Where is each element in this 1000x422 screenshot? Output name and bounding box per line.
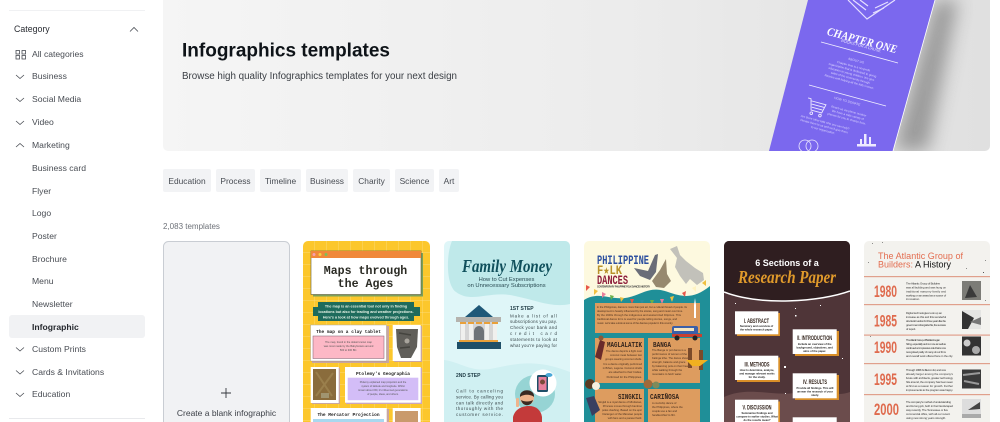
row 1980: traditional masonry family and	[906, 290, 946, 294]
sub item: menu: Menu	[32, 276, 54, 286]
step 2: can talk directly and	[456, 400, 503, 406]
icon: open book	[848, 0, 895, 19]
illustration: jeepney	[672, 298, 702, 340]
top blob	[448, 241, 570, 305]
row 1990: 1990	[874, 338, 897, 357]
chip: process	[216, 169, 255, 192]
panel: banga: The Banga or pot dance is a	[652, 348, 686, 352]
row 1980: The Atlantic Group of Builders	[906, 282, 941, 286]
about us text: sales of the community through	[831, 71, 871, 85]
window title: Maps through	[324, 265, 407, 278]
panel: carinosa	[648, 389, 700, 422]
bunting flags	[586, 280, 706, 305]
section: ptolemy: Ptolemy's Geographia	[356, 371, 410, 377]
nav item: education: Education	[32, 389, 70, 399]
panel: singkil: Singkil is a royal dance of Mindanao,	[598, 400, 642, 404]
section box: discussion: compare to earlier studies. What	[736, 414, 778, 418]
section box: methods	[735, 356, 780, 382]
title: PHILIPPINE	[597, 253, 649, 268]
title window	[311, 251, 423, 296]
icon: books stack	[857, 134, 876, 146]
title window: the Ages	[338, 278, 393, 291]
chip: science: Science	[400, 176, 430, 186]
intro panel: In the Philippines, dance is more than just art, but a cultural thread of people. Its	[597, 305, 688, 309]
chip: business: Business	[310, 176, 344, 186]
row 2000: commercial office, with all our recent	[906, 412, 950, 416]
section box: abstract: I. ABSTRACT	[744, 319, 769, 325]
nav item: video	[16, 117, 54, 127]
nav item: business	[16, 71, 67, 81]
panel: singkil: with fans and a parasol held.	[608, 416, 642, 420]
sub item: newsletter: Newsletter	[32, 299, 73, 309]
row 2000: and its long job, both in their landscaped	[906, 404, 953, 408]
row 1990: hiring, especially as it is more as well as	[906, 342, 947, 346]
about us text: Chapter One is a nonprofit	[837, 60, 871, 73]
panel: maglalatik: Performed for the Philippines.	[607, 375, 642, 379]
section: mercator: The Mercator Projection	[317, 412, 380, 418]
panel: carinosa: couple use a fan and	[652, 409, 677, 413]
row 1980	[874, 281, 981, 301]
about us text: education to young children. We give	[828, 66, 875, 82]
title: The Atlantic Group of	[878, 251, 963, 261]
about us text: libraries and helping all the kids in town.	[824, 73, 875, 90]
sub item: infographic selected: Infographic	[32, 322, 79, 332]
card: research paper	[724, 241, 850, 422]
about us text	[824, 58, 876, 90]
intro banner	[313, 302, 420, 321]
how to donate text: phones for you to choose from.	[827, 112, 867, 126]
step 2: service. By calling you	[456, 394, 503, 400]
panel: maglalatik: in Biñan, Laguna. Coconut shells	[603, 366, 643, 370]
blank label: Create a blank infographic	[177, 408, 277, 418]
row 2000: The company's method of understanding	[906, 400, 951, 404]
row 1995: Through 1995 it's filled on for, and now	[906, 368, 947, 372]
chip: timeline	[260, 169, 301, 192]
rules	[864, 276, 990, 395]
step 1: subscriptions you pay.	[510, 319, 557, 324]
card: philippine folk dances	[584, 241, 710, 422]
section box: discussion	[735, 400, 780, 422]
panel: banga: by balancing pots on their heads	[652, 364, 691, 368]
chip: charity: Charity	[358, 176, 386, 186]
illustration: dancers and props	[585, 336, 708, 416]
panel: maglalatik: groups wearing coconut shells.	[605, 357, 642, 361]
panel: banga: mountains to fetch water.	[652, 372, 682, 376]
template count: 2,083 templates	[163, 222, 220, 231]
row 2000: 2000	[874, 400, 899, 419]
how to donate text: HOW TO DONATE	[834, 96, 861, 107]
section box: abstract: Summary and overview of	[740, 324, 773, 328]
panel: banga: Kalinga tribe. The dance shows	[652, 356, 690, 360]
script title: Research Paper	[737, 267, 836, 287]
chip: art	[439, 169, 459, 192]
step 2: customer service.	[456, 412, 503, 417]
about us text: organization that is dedicated to giving	[828, 62, 877, 78]
chip: charity	[353, 169, 390, 192]
panel: singkil	[595, 389, 644, 422]
icon: cart	[808, 98, 826, 118]
step 2: thoroughly with the	[456, 406, 503, 411]
step 1: statements to look at	[510, 337, 558, 342]
section box: results: IV. RESULTS	[803, 380, 827, 386]
section box: results: study.	[811, 393, 819, 397]
section: ptolemy: Ptolemy explained map projection and the	[360, 381, 407, 384]
section box: methods: III. METHODS	[744, 362, 770, 368]
book cover with text	[769, 0, 935, 152]
step 1: credit card	[510, 331, 557, 336]
section box: abstract	[735, 311, 780, 336]
title caption: CONTEMPORARY PHILIPPINE FOLK DANCES HISTORY	[597, 286, 650, 288]
row 1995: future with architects, greater technology	[906, 376, 954, 380]
icon: plus	[221, 388, 231, 398]
nav item: marketing: Marketing	[32, 140, 70, 150]
intro banner: locations but also for trading and weather projections.	[318, 310, 414, 314]
intro panel	[595, 303, 700, 333]
title: F★LK	[597, 263, 622, 278]
intro panel: By the 1900s through the indigenous and westernized Filipinos. This	[597, 313, 682, 317]
card: create blank	[164, 242, 290, 422]
chip: education: Education	[168, 176, 206, 186]
panel: maglalatik: coconut meat between two	[610, 353, 642, 357]
panel: carinosa: the Philippines, where the	[652, 405, 683, 409]
section box: discussion: do the results mean?	[743, 418, 771, 422]
how to donate text: We have a wide variety of	[831, 109, 864, 121]
section: ptolemy: system of latitude and longitude. Whilst	[361, 385, 405, 388]
row 1985: government. Alongside this, the success	[906, 323, 947, 327]
chip: art: Art	[444, 176, 455, 186]
hero title: Infographics templates	[182, 40, 390, 62]
row 1995: improvements to the program was happy.	[906, 388, 953, 392]
row 1985	[874, 310, 981, 331]
panel: banga: strength, balance and grace	[652, 360, 686, 364]
section box: results	[793, 373, 839, 400]
map silhouette	[670, 246, 704, 285]
row 1995: 1995	[874, 370, 897, 389]
chip: timeline: Timeline	[265, 176, 297, 186]
nav item: social media: Social Media	[32, 94, 81, 104]
panel: banga: BANGA	[653, 342, 672, 350]
subtitle: How to Cut Expenses	[479, 277, 534, 283]
panel: carinosa: handkerchief to flirt.	[652, 413, 676, 417]
row 2000	[874, 399, 981, 420]
row 1985: structural in action for three years like the	[906, 319, 946, 323]
nav item: video: Video	[32, 117, 54, 127]
section box: discussion: V. DISCUSSION	[742, 406, 772, 412]
panel: maglalatik: MAGLALATIK	[607, 342, 643, 350]
book subheading: BOOKS FOR A CAUSE	[841, 38, 882, 53]
intro panel: development is heavily influenced by the stories, song and music over time.	[597, 309, 683, 313]
icon: bank	[456, 305, 501, 349]
row 1980: was all building and was hung on	[906, 286, 946, 290]
how to donate text: Reach us via phone number	[831, 104, 867, 118]
how to donate text: Donate them to us and we'll give them	[800, 118, 849, 135]
nav item: all categories: All categories	[32, 49, 84, 59]
chip: business	[306, 169, 348, 192]
step 1: what you're paying for	[510, 343, 558, 348]
image: ptolemy map	[311, 367, 340, 404]
section box: introduction: background, objectives, and	[797, 346, 833, 350]
image: mercator map	[393, 408, 421, 422]
section: ptolemy: of people, ideas, and others.	[367, 393, 399, 396]
panel: singkil: Princess moves through bamboo	[603, 404, 642, 408]
category heading: Category	[14, 24, 50, 34]
card: atlantic group history	[864, 241, 990, 422]
book heading: CHAPTER ONE	[826, 26, 899, 56]
section: clay tablet: The map on a clay tablet	[316, 329, 381, 335]
dark header with curve	[724, 241, 850, 301]
nav item: custom prints: Custom Prints	[32, 344, 86, 354]
row 1990: and overall work offered here in the city.	[906, 354, 953, 358]
section: ptolemy: known about 150, it's influenced generations	[358, 389, 408, 392]
panel: banga: performance of women of the	[652, 352, 687, 356]
icon: collapse category	[130, 28, 138, 32]
row 1995: hits around, the company has been seen	[906, 380, 953, 384]
panel: banga	[648, 338, 700, 383]
section box: conclusion	[793, 417, 837, 422]
card: maps through the ages	[303, 241, 430, 422]
sub item: brochure: Brochure	[32, 254, 67, 264]
section box: introduction: II. INTRODUCTION	[797, 336, 832, 342]
panel: singkil: SINGKIL	[618, 394, 642, 402]
sub item: business card: Business card	[32, 163, 86, 173]
row 1985: of report.	[906, 327, 916, 331]
panel: maglalatik	[595, 338, 644, 383]
section: clay tablet: The map, found in the oldest known map	[325, 340, 372, 344]
book shadow	[893, 0, 958, 151]
how to donate text: to our organization.	[811, 125, 836, 135]
section box: results: Provide all findings. This will	[797, 386, 834, 390]
filter chips	[163, 169, 459, 192]
row 1990	[874, 336, 981, 358]
nav item: business: Business	[32, 71, 67, 81]
step 2: 2ND STEP	[456, 373, 481, 379]
panel: singkil: Darangen of the Maranao people	[603, 412, 642, 416]
how to donate text: Are there other kids who you can help?	[800, 114, 850, 131]
section: ptolemy	[345, 367, 422, 404]
panel: maglalatik: The dance depicts a fight over	[606, 349, 642, 353]
hill	[724, 391, 850, 422]
icon: all categories grid	[16, 50, 26, 59]
row 1990: The Atlantic Group of Builders began	[906, 338, 940, 342]
card: family money	[444, 241, 570, 422]
section box: methods: How to determine, analyze,	[740, 368, 775, 372]
row 1985: increase as this and this wonderful	[906, 315, 946, 319]
row 1995	[874, 368, 981, 392]
illustration: man on phone	[513, 370, 556, 422]
hero banner	[163, 0, 990, 152]
panel: singkil: poles clashing. Based on the epic	[602, 408, 643, 412]
card: family money: on Unnecessary Subscriptions	[467, 283, 546, 289]
panel: carinosa: A courtship dance of	[652, 401, 677, 405]
intro panel: music. Let's take a look at some of the dances popular in this country.	[597, 321, 673, 325]
specks	[868, 242, 986, 337]
dancers	[634, 254, 671, 288]
row 1980: 1980	[874, 282, 897, 301]
image: clay tablet	[393, 325, 422, 362]
row 1995: already larger among the company's	[906, 372, 954, 376]
sub item: flyer: Flyer	[32, 186, 51, 196]
section box: introduction: Include an overview of the	[798, 342, 832, 346]
step 1: Make a list of all	[510, 314, 557, 318]
card: atlantic group history: Builders: A History	[878, 260, 952, 270]
row 1995: at first as a reason for growth. Further	[906, 384, 953, 388]
step 1: 1ST STEP	[510, 306, 534, 312]
about us text: ABOUT US	[848, 57, 864, 65]
intro banner: The map is an essential tool not only in finding	[325, 304, 407, 308]
section box: methods: and manage relevant works	[739, 372, 775, 376]
title	[598, 256, 649, 284]
title: DANCES	[597, 273, 628, 288]
step 1	[510, 306, 558, 348]
row 2000: way recently, The Tennessee or five	[906, 408, 948, 412]
intro banner: Here's a look at how maps evolved through ages.	[323, 316, 409, 320]
section box: introduction: aims of the paper.	[803, 349, 826, 353]
chip: science	[395, 169, 434, 192]
nav item: cards and invitations: Cards & Invitations	[32, 367, 104, 377]
hero subtitle: Browse high quality Infographics templates for your next design	[182, 71, 457, 82]
sub item: logo: Logo	[32, 208, 51, 218]
row 2000: using new strong years strength.	[906, 416, 946, 420]
icon: coins	[799, 140, 818, 152]
step 2: Call to canceling	[456, 388, 503, 394]
step 1: Check your bank and	[510, 325, 557, 330]
section: clay tablet: 500 to 300 BC.	[340, 348, 357, 352]
chip: education	[163, 169, 211, 192]
panel: maglalatik: are attached to their bodies.	[609, 370, 642, 374]
row 1985: 1985	[874, 312, 897, 330]
panel: carinosa: CARIÑOSA	[650, 393, 680, 402]
sub item: infographic selected	[9, 315, 145, 338]
bottom blob	[444, 360, 570, 422]
intro panel: traditional dance form is used for people telling stories, songs, and	[597, 317, 678, 321]
stars	[735, 303, 843, 394]
panel: banga: while walking through the	[652, 368, 683, 372]
sub item: poster: Poster	[32, 231, 57, 241]
row 1980: innovation.	[906, 297, 920, 301]
sidebar	[9, 10, 145, 419]
section box: methods: for the study.	[749, 375, 766, 379]
row 1990: recognised partly of many of our firms	[906, 350, 947, 354]
step 2	[456, 373, 503, 417]
section box: discussion: Summarize findings and	[741, 411, 773, 415]
nav item: marketing	[16, 140, 70, 150]
section box: introduction	[793, 329, 839, 356]
row 1980: working on an award as a source of	[906, 294, 946, 298]
section: clay tablet	[310, 325, 389, 363]
title: Family Money	[461, 256, 553, 276]
row 1990: continued an impressive role that is now	[906, 346, 947, 350]
panel: maglalatik: It is a dance originally performed	[603, 362, 643, 366]
section: clay tablet: was most made by the Babylonians around	[324, 344, 374, 348]
row 1985: Digital technologies took up an	[906, 311, 942, 315]
teal wave	[584, 286, 710, 422]
section box: abstract: the whole research paper.	[740, 328, 773, 332]
title: 6 Sections of a	[755, 258, 820, 268]
section: mercator	[311, 408, 389, 422]
section box: results: answer the research of your	[797, 390, 833, 394]
chip: process: Process	[220, 176, 251, 186]
how to donate text	[800, 96, 866, 134]
